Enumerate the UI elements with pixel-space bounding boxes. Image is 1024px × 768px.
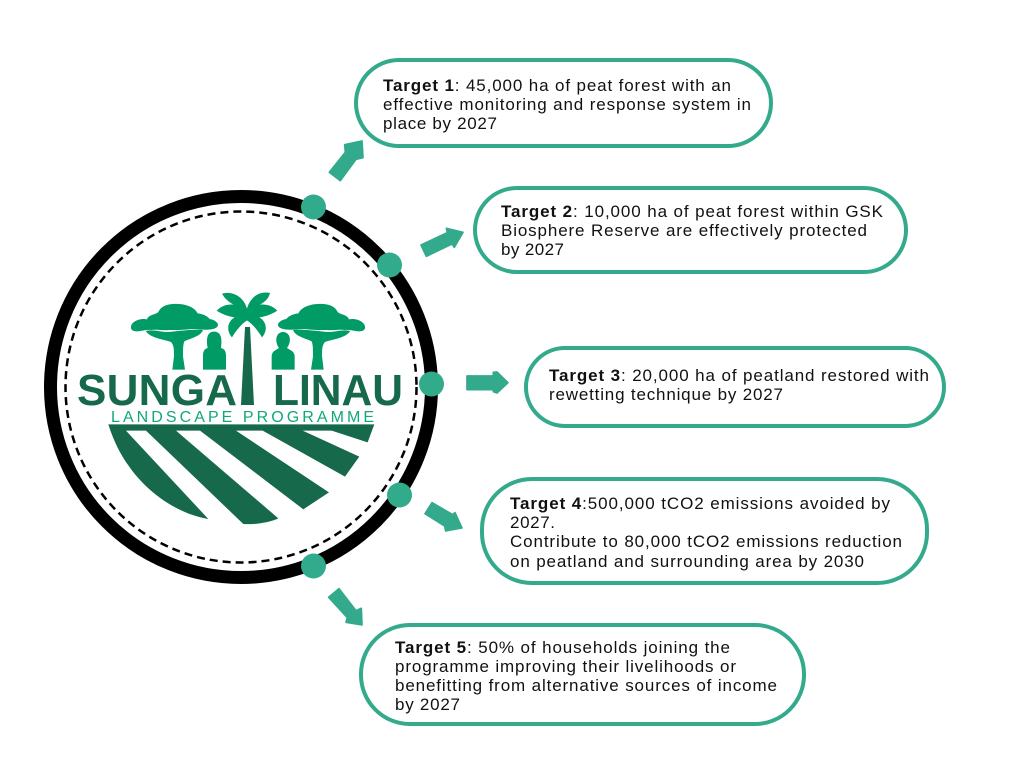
panel: target 1 <box>356 60 771 146</box>
icon: left tree <box>131 304 218 370</box>
marker dot 5 <box>301 554 326 578</box>
text: target 5 <box>395 638 777 714</box>
text: target 3 <box>549 366 929 404</box>
text: target 4: Target 4:500,000 tCO2 emissions avoided by <box>510 494 890 513</box>
arrow to target 3 <box>467 372 508 393</box>
arrow to target 1 <box>329 141 363 181</box>
text: target 4: Contribute to 80,000 tCO2 emissions reduction <box>510 532 902 551</box>
arrow to target 2 <box>421 228 463 256</box>
logo word: LINAU: LINAU <box>273 366 403 415</box>
text: target 4: 2027. <box>510 513 555 532</box>
text: target 1: effective monitoring and response system in <box>383 95 751 114</box>
icon: woman figure <box>203 332 226 370</box>
text: target 3: Target 3: 20,000 ha of peatland restored with <box>549 366 929 385</box>
text: target 2: Target 2: 10,000 ha of peat forest within GSK <box>501 202 884 221</box>
text: target 4: on peatland and surrounding area by 2030 <box>510 552 864 571</box>
icon: palm tree <box>217 292 277 405</box>
panel: target 3 <box>526 348 944 426</box>
logo field stripes <box>108 424 374 524</box>
text: target 3: rewetting technique by 2027 <box>549 385 783 404</box>
panel: target 4 <box>482 479 927 583</box>
text: target 4 <box>510 494 902 571</box>
text: target 5: Target 5: 50% of households joining the <box>395 638 730 657</box>
text: target 1: place by 2027 <box>383 114 497 133</box>
icon: man figure <box>272 332 295 370</box>
text: target 2 <box>501 202 884 259</box>
panel: target 5 <box>361 625 804 724</box>
text: target 1: Target 1: 45,000 ha of peat forest with an <box>383 76 731 95</box>
arrow to target 5 <box>329 589 362 625</box>
marker dot 3 <box>419 372 444 396</box>
arrow to target 4 <box>425 503 462 531</box>
text: target 2: by 2027 <box>501 240 564 259</box>
marker dot 2 <box>377 252 402 278</box>
text: target 1 <box>383 76 751 133</box>
text: target 2: Biosphere Reserve are effectively protected <box>501 221 867 240</box>
logo: Sungai Linau Landscape Programme <box>77 292 403 524</box>
marker dot 4 <box>387 482 412 508</box>
logo subtitle: LANDSCAPE PROGRAMME <box>111 409 374 426</box>
text: target 5: benefitting from alternative sources of income <box>395 676 777 695</box>
panel: target 2 <box>475 188 906 272</box>
icon: right tree <box>278 304 365 370</box>
logo badge: concentric circles <box>50 196 432 578</box>
text: target 5: by 2027 <box>395 695 460 714</box>
marker dot 1 <box>301 194 326 220</box>
text: target 5: programme improving their livelihoods or <box>395 657 736 676</box>
logo word: SUNGA: SUNGA <box>77 366 237 415</box>
